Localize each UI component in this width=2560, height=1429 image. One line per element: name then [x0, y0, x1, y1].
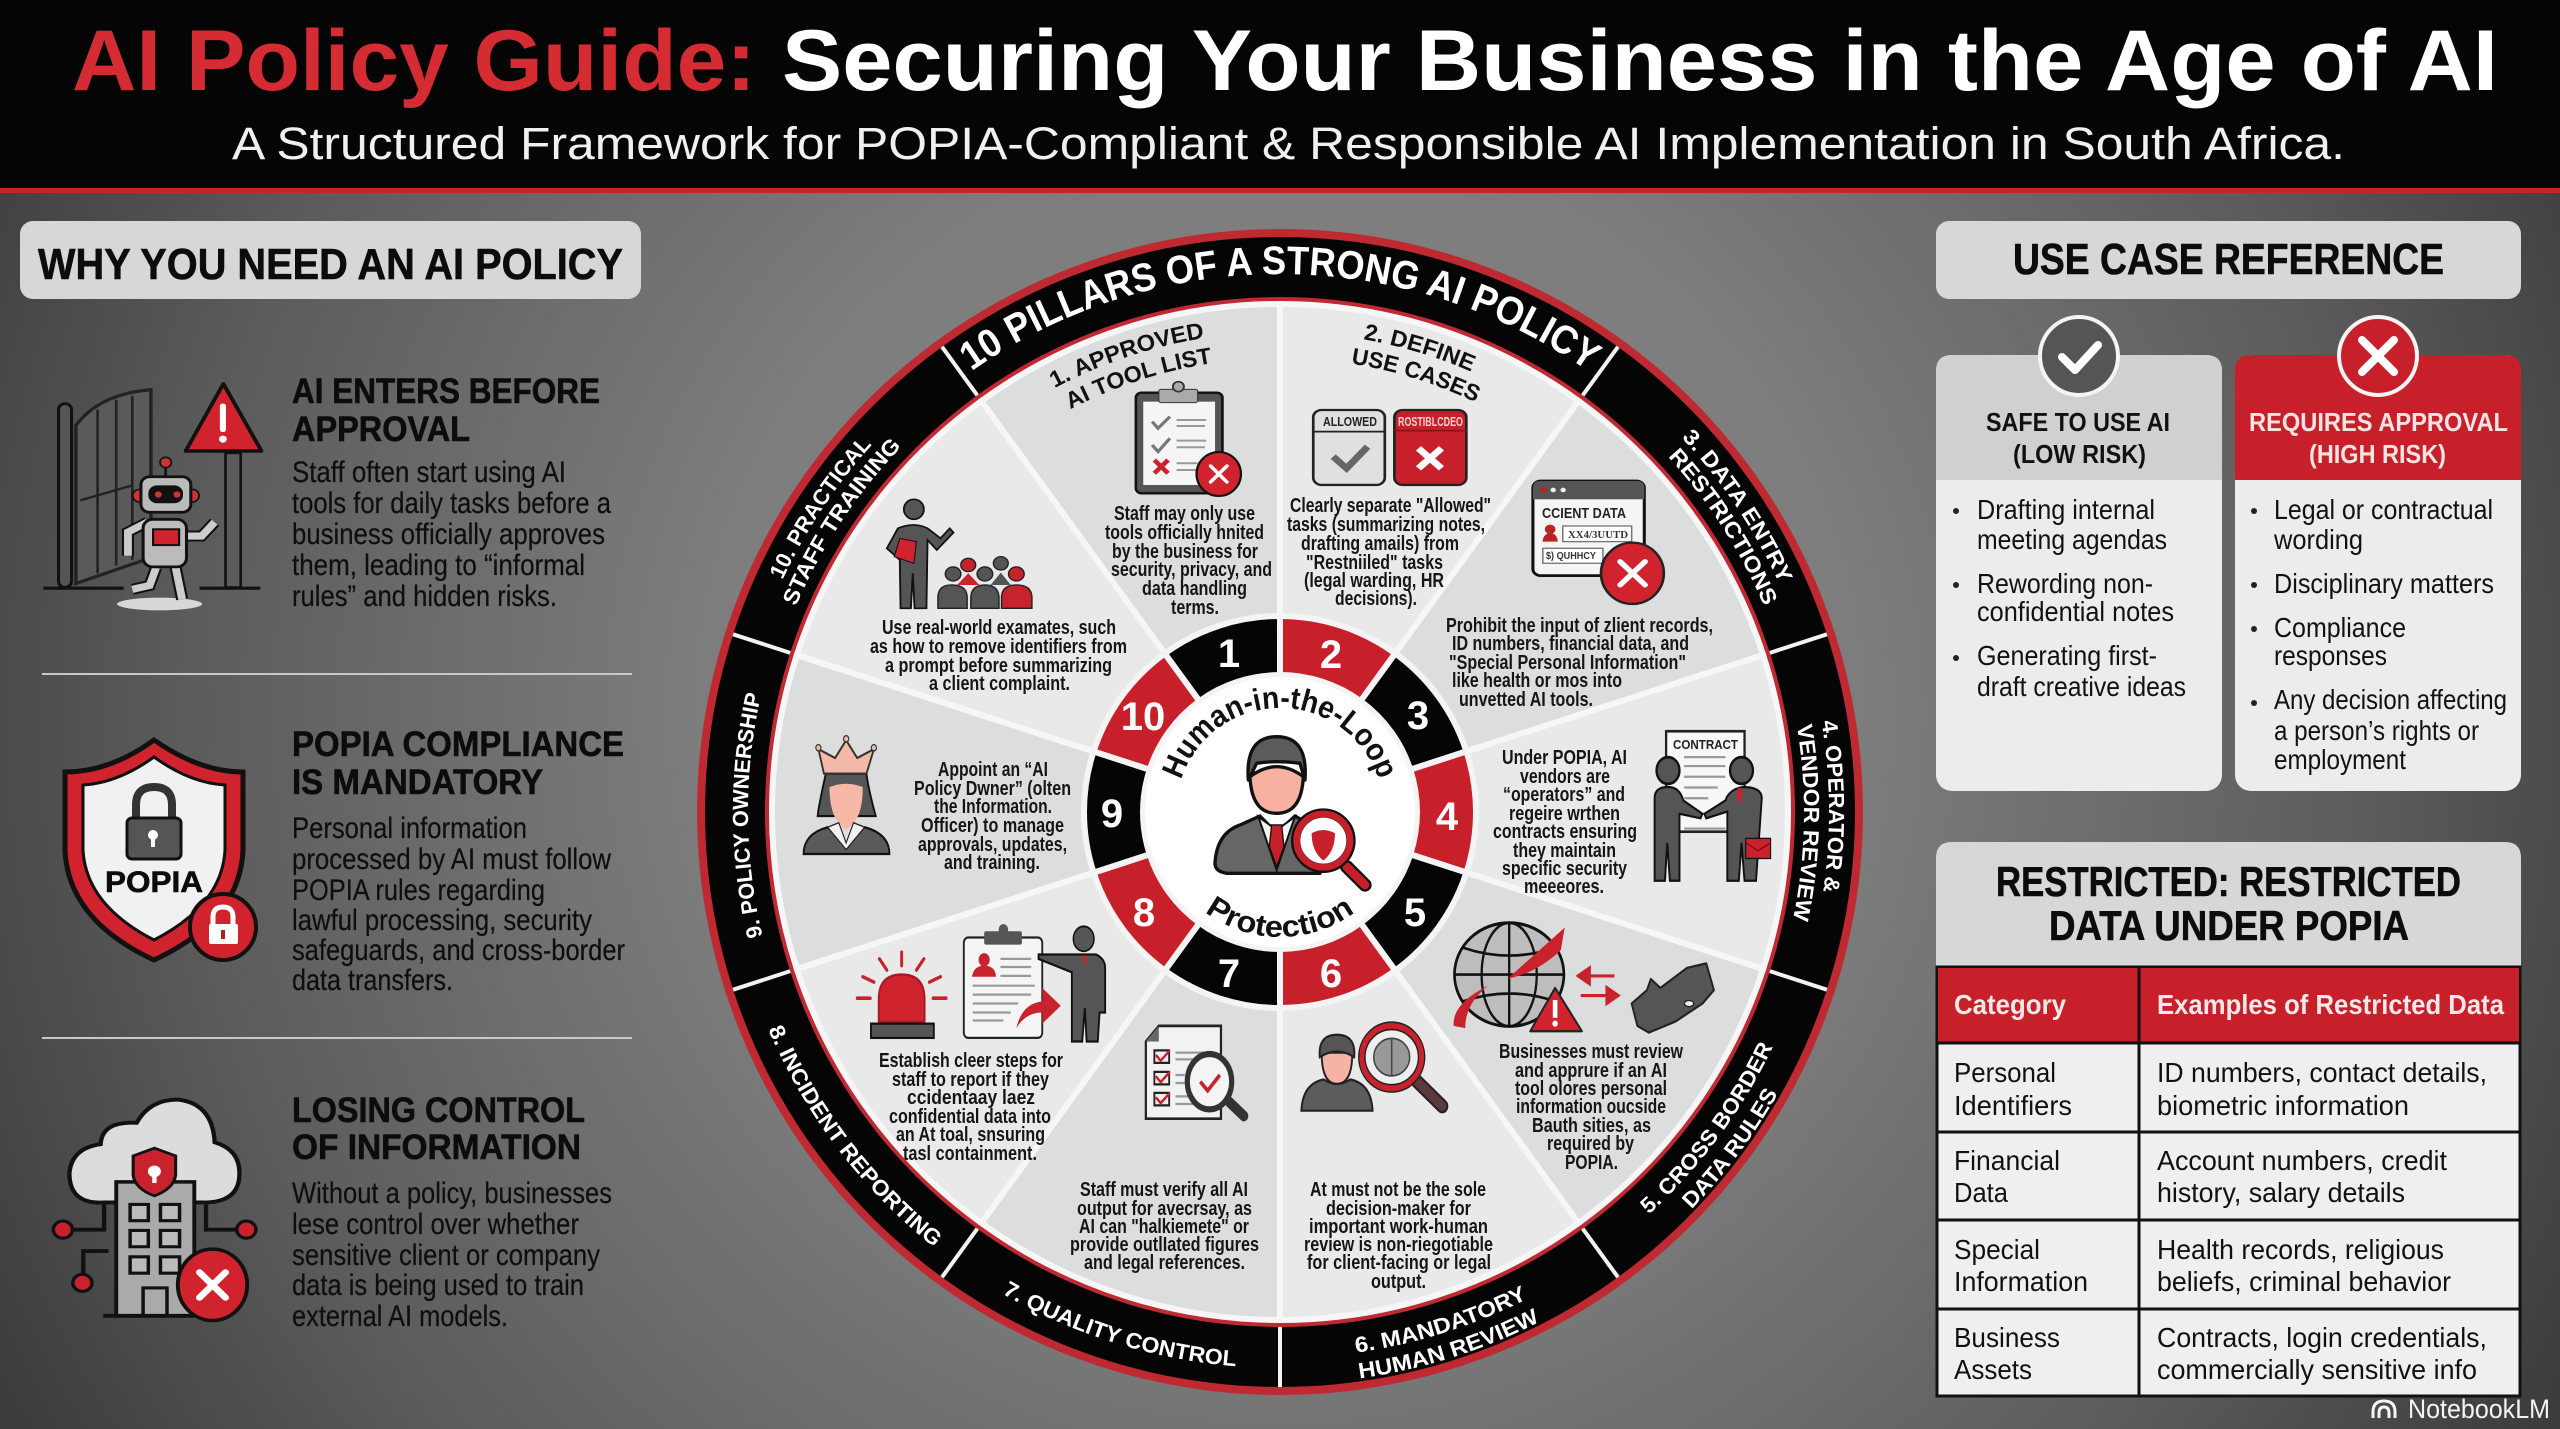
outer band labels: 10. PRACTICAL [771, 441, 872, 579]
description: “operators” and [1503, 784, 1625, 806]
card: requires approval [2235, 317, 2521, 791]
hub number ring [1058, 586, 1502, 1038]
icon: client data window: CCIENT DATA [1542, 505, 1626, 522]
text block: POPIA compliance: safeguards, and cross-border [292, 934, 625, 967]
pillar 10: practical staff training [870, 499, 1127, 695]
wedges [705, 226, 1855, 1398]
description: a prompt before summarizing [885, 655, 1112, 677]
description [1105, 503, 1272, 619]
pillar 1: approved AI tool list [1050, 324, 1272, 619]
table header text [1954, 989, 2504, 1020]
list: high-risk uses: employment [2274, 744, 2406, 775]
description: a client complaint. [929, 673, 1070, 695]
description: Bauth sities, as [1532, 1115, 1651, 1137]
description: as how to remove identifiers from [870, 636, 1127, 658]
text block: losing control: Without a policy, businesses [292, 1177, 612, 1210]
text block: losing control [292, 1091, 612, 1333]
text block: POPIA compliance: IS MANDATORY [292, 763, 543, 802]
description: "Restniiled" tasks [1306, 552, 1443, 574]
icon: allowed and restricted boxes [1313, 410, 1466, 485]
text block: losing control: data is being used to train [292, 1269, 584, 1302]
description: like health or mos into [1452, 670, 1622, 692]
table rows: Health records, religious [2157, 1234, 2444, 1265]
description: approvals, updates, [918, 834, 1067, 856]
table heading: DATA UNDER POPIA [2049, 902, 2409, 949]
description: (legal warding, HR [1304, 570, 1444, 592]
hub caption on arc: Protection [1206, 896, 1354, 938]
table rows: commercially sensitive info [2157, 1354, 2477, 1385]
list: high-risk uses: Legal or contractual [2274, 494, 2493, 525]
pillar 3: data entry restrictions [1446, 481, 1713, 711]
NotebookLM watermark: NotebookLM [2408, 1394, 2550, 1424]
description [1304, 1179, 1493, 1293]
description: terms. [1171, 597, 1219, 619]
hub number ring: 1 [1218, 632, 1240, 676]
outer band labels: 5. CROSS BORDER [1640, 1042, 1773, 1212]
description: At must not be the sole [1310, 1179, 1486, 1201]
list: high-risk uses: Compliance [2274, 612, 2406, 643]
list: low-risk uses [1953, 494, 2186, 702]
table rows: beliefs, criminal behavior [2157, 1266, 2451, 1297]
outer band labels: 3. DATA ENTRY [1684, 430, 1793, 578]
icon: client data window: XX4/3UUTD [1568, 530, 1628, 541]
table grid [1937, 967, 2520, 1396]
table header text: Category [1954, 989, 2066, 1020]
pillar 2: define use cases: 2. DEFINE [1364, 324, 1476, 372]
description: review is non-riegotiable [1304, 1234, 1493, 1256]
table header text: Examples of Restricted Data [2157, 989, 2504, 1020]
text block: POPIA compliance: POPIA COMPLIANCE [292, 725, 624, 764]
description: decision-maker for [1326, 1198, 1471, 1220]
text block: AI enters before approval [292, 372, 611, 613]
icon: checklist magnifier [1146, 1026, 1244, 1119]
description: data handling [1142, 578, 1247, 600]
description: and legal references. [1084, 1252, 1245, 1274]
table rows: Account numbers, credit [2157, 1145, 2447, 1176]
text block: AI enters before approval: business officially approves [292, 518, 605, 551]
description [870, 617, 1127, 695]
table rows: Identifiers [1954, 1090, 2072, 1121]
pillar 8: incident reporting [857, 924, 1105, 1165]
description: meeeores. [1524, 876, 1604, 898]
heading box [1936, 221, 2521, 299]
icon: clipboard [1136, 382, 1241, 496]
table heading [1936, 842, 2521, 966]
description: ccidentaay laez [907, 1087, 1035, 1109]
icon: contract handshake: CONTRACT [1673, 737, 1738, 752]
description: Appoint an “AI [938, 759, 1048, 781]
icon: allowed and restricted boxes: ROSTIBLCDEO [1398, 414, 1463, 429]
description: AI can "halkiemete" or [1079, 1216, 1249, 1238]
pillar 9: policy ownership [804, 736, 1071, 874]
list: low-risk uses: draft creative ideas [1977, 671, 2186, 702]
icon: crowned policy owner [804, 736, 889, 854]
description [1499, 1041, 1683, 1174]
hub number ring: 6 [1320, 952, 1342, 996]
description [1287, 495, 1491, 610]
table rows: Financial [1954, 1145, 2060, 1176]
description: output. [1371, 1271, 1426, 1293]
text block: POPIA compliance: lawful processing, security [292, 904, 592, 937]
table rows [1954, 1057, 2487, 1385]
description: important work-human [1309, 1216, 1488, 1238]
description: by the business for [1112, 541, 1258, 563]
text block: losing control: lese control over whether [292, 1208, 579, 1241]
text block: losing control: OF INFORMATION [292, 1128, 581, 1167]
list: low-risk uses: meeting agendas [1977, 524, 2167, 555]
outer band labels [732, 430, 1844, 1378]
icon: cloud and building [53, 1100, 256, 1321]
description [879, 1050, 1063, 1165]
description: staff to report if they [892, 1069, 1050, 1091]
outer band labels: HUMAN REVIEW [1358, 1308, 1536, 1378]
description: for client-facing or legal [1307, 1252, 1491, 1274]
table rows: Personal [1954, 1057, 2056, 1088]
title: Securing Your Business in the Age of AI [782, 13, 2498, 109]
outer band labels: 4. OPERATOR & [1822, 720, 1844, 892]
description: information oucside [1516, 1096, 1666, 1118]
table rows: Data [1954, 1177, 2008, 1208]
icon: contract handshake [1655, 731, 1771, 881]
list: low-risk uses: Rewording non- [1977, 568, 2153, 599]
text block: POPIA compliance: Personal information [292, 812, 527, 845]
list: low-risk uses: Generating first- [1977, 640, 2157, 671]
description: tasl containment. [903, 1143, 1037, 1165]
outer band labels: 9. POLICY OWNERSHIP [732, 692, 762, 938]
icon: client data window [1533, 481, 1664, 604]
description: contracts ensuring [1493, 821, 1637, 843]
description [1493, 747, 1637, 898]
icon: allowed and restricted boxes: ALLOWED [1323, 414, 1377, 429]
hub number ring: 9 [1101, 792, 1123, 836]
card: safe to use AI: (LOW RISK) [2013, 439, 2146, 469]
panel: restricted data table [1936, 842, 2521, 1396]
table rows: Business [1954, 1322, 2060, 1353]
outer band labels: 8. INCIDENT REPORTING [770, 1025, 940, 1245]
text block: losing control: sensitive client or company [292, 1239, 600, 1272]
icon: globe and South Africa [1454, 923, 1714, 1033]
card: safe to use AI: SAFE TO USE AI [1986, 407, 2170, 437]
panel: why you need an AI policy [20, 221, 641, 1333]
outer rings [697, 229, 1863, 1395]
card: requires approval: REQUIRES APPROVAL [2249, 407, 2508, 437]
text block: POPIA compliance: processed by AI must follow [292, 843, 611, 876]
icon: robot entering gate [43, 384, 262, 610]
text block: AI enters before approval: APPROVAL [292, 410, 470, 449]
list: high-risk uses [2251, 494, 2507, 775]
list: high-risk uses: responses [2274, 640, 2387, 671]
pillar 2: define use cases: USE CASES [1353, 348, 1480, 400]
description: and training. [944, 852, 1040, 874]
description: "Special Personal Information" [1449, 652, 1686, 674]
pillar 2: define use cases [1287, 324, 1491, 610]
description: Staff may only use [1114, 503, 1255, 525]
outer band labels: 6. MANDATORY [1356, 1285, 1522, 1352]
description: and apprure if an AI [1515, 1060, 1667, 1082]
description [1446, 615, 1713, 711]
description: provide outlIated figures [1070, 1234, 1259, 1256]
icon: POPIA shield [65, 740, 256, 960]
text block: losing control: LOSING CONTROL [292, 1091, 585, 1130]
icon: person and brain magnifier [1301, 1026, 1442, 1111]
description [1070, 1179, 1259, 1274]
hub number ring: 3 [1407, 694, 1429, 738]
hub heading on arc: Human-in-the-Loop [1162, 688, 1392, 778]
card: safe to use AI [1936, 317, 2222, 791]
table rows: Assets [1954, 1354, 2032, 1385]
description [914, 759, 1071, 874]
text block: POPIA compliance: POPIA rules regarding [292, 874, 545, 907]
outer band labels: STAFF TRAINING [784, 440, 899, 604]
description: tasks (summarizing notes, [1287, 514, 1485, 536]
icon: trainer and group [887, 499, 1032, 608]
table rows: biometric information [2157, 1090, 2409, 1121]
description: the Information. [934, 796, 1052, 818]
card: requires approval: (HIGH RISK) [2309, 439, 2446, 469]
description: Establish cleer steps for [879, 1050, 1063, 1072]
icon: POPIA shield: POPIA [105, 866, 203, 899]
text block: AI enters before approval: Staff often start using AI [292, 456, 566, 489]
description: drafting amails) from [1301, 533, 1459, 555]
wheel title on arc: 10 PILLARS OF A STRONG AI POLICY [960, 246, 1604, 370]
title: AI Policy Guide: [72, 13, 756, 109]
hub number ring: 2 [1320, 633, 1342, 677]
text block: POPIA compliance [292, 725, 625, 997]
hub number ring: 10 [1121, 695, 1165, 739]
description: Policy Dwner” (olten [914, 778, 1071, 800]
list: high-risk uses: a person’s rights or [2274, 715, 2479, 746]
description: specific security [1502, 858, 1628, 880]
table rows: Information [1954, 1266, 2088, 1297]
description: Staff must verify all AI [1080, 1179, 1248, 1201]
description: unvetted AI tools. [1459, 689, 1593, 711]
text block: AI enters before approval: AI ENTERS BEFORE [292, 372, 600, 411]
heading box: USE CASE REFERENCE [2013, 235, 2444, 284]
text block: AI enters before approval: rules” and hidden risks. [292, 580, 557, 613]
description: output for avecrsay, as [1077, 1198, 1252, 1220]
hub number ring: 4 [1436, 795, 1459, 839]
description: security, privacy, and [1111, 559, 1272, 581]
pillar 7: quality control [1070, 1026, 1259, 1274]
list: high-risk uses: Disciplinary matters [2274, 568, 2494, 599]
pillar 1: approved AI tool list: AI TOOL LIST [1068, 348, 1210, 409]
outer band labels: DATA RULES [1682, 1088, 1776, 1208]
description: required by [1547, 1133, 1635, 1155]
icon: alarm, report and man [857, 924, 1105, 1041]
text block: AI enters before approval: tools for daily tasks before a [292, 487, 611, 520]
description: tools officially hnited [1105, 522, 1264, 544]
table rows: ID numbers, contact details, [2157, 1057, 2487, 1088]
hub centre [1145, 677, 1415, 947]
description: tool olores personal [1515, 1078, 1667, 1100]
pillar 4: operator and vendor review [1493, 731, 1771, 898]
list: high-risk uses: Any decision affecting [2274, 684, 2507, 715]
description: Use real-world examates, such [882, 617, 1116, 639]
description: regeire wrthen [1509, 803, 1620, 825]
hub number ring: 7 [1218, 952, 1240, 996]
text block: losing control: external AI models. [292, 1300, 508, 1333]
hub number ring: 5 [1404, 891, 1426, 935]
hub number ring: 8 [1133, 891, 1155, 935]
heading box: WHY YOU NEED AN AI POLICY [38, 240, 623, 289]
table rows: Special [1954, 1234, 2040, 1265]
description: ID numbers, financial data, and [1452, 633, 1689, 655]
description: Businesses must review [1499, 1041, 1683, 1063]
icon: check badge [2040, 317, 2118, 395]
list: low-risk uses: confidential notes [1977, 596, 2174, 627]
icon: client data window: $) QUHHCY [1546, 551, 1596, 562]
icon: human reviewer with magnifier [1215, 737, 1365, 885]
text block: AI enters before approval: them, leading to “informal [292, 549, 585, 582]
list: high-risk uses: wording [2273, 524, 2363, 555]
outer band labels: RESTRICTIONS [1669, 448, 1776, 604]
pillar 5: cross border data rules [1454, 923, 1714, 1174]
description: Under POPIA, AI [1502, 747, 1627, 769]
table heading: RESTRICTED: RESTRICTED [1996, 858, 2461, 905]
header band [0, 0, 2560, 193]
subtitle: A Structured Framework for POPIA-Compliant & Responsible AI Implementation in South Africa. [232, 118, 2345, 169]
description: Clearly separate "Allowed" [1290, 495, 1491, 517]
outer band labels: 7. QUALITY CONTROL [1004, 1280, 1236, 1366]
panel: use case reference [1936, 221, 2521, 791]
heading box [20, 221, 641, 299]
pillar 1: approved AI tool list: 1. APPROVED [1050, 324, 1202, 388]
table rows: history, salary details [2157, 1177, 2405, 1208]
description: POPIA. [1565, 1152, 1618, 1174]
outer band labels: VENDOR REVIEW [1794, 723, 1820, 922]
text block: POPIA compliance: data transfers. [292, 964, 453, 997]
table rows: Contracts, login credentials, [2157, 1322, 2487, 1353]
wheel: 10 pillars [697, 229, 1863, 1395]
description: decisions). [1335, 588, 1417, 610]
list: low-risk uses: Drafting internal [1977, 494, 2155, 525]
icon: cross badge [2339, 317, 2417, 395]
description: an At toal, snsuring [896, 1124, 1045, 1146]
pillar 6: mandatory human review [1301, 1026, 1493, 1293]
description: vendors are [1520, 766, 1610, 788]
description: Officer) to manage [921, 815, 1064, 837]
description: confidential data into [889, 1106, 1051, 1128]
description: Prohibit the input of zlient records, [1446, 615, 1713, 637]
description: they maintain [1513, 840, 1616, 862]
